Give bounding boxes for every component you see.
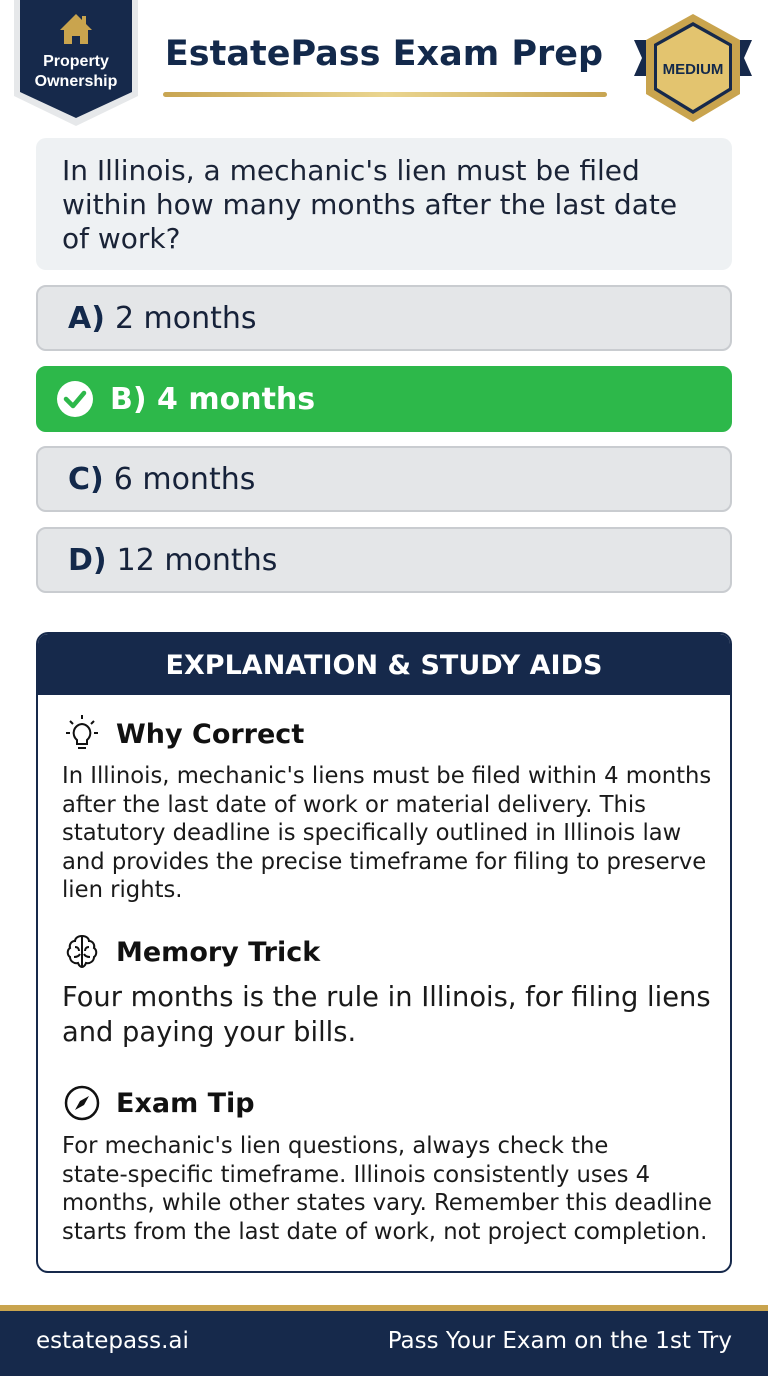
text: why correct: statutory deadline is specifically outlined in Illinois law (62, 820, 681, 846)
text: exam tip: state-specific timeframe. Illinois consistently uses 4 (62, 1162, 650, 1188)
panel header: EXPLANATION & STUDY AIDS (166, 650, 602, 681)
badge: medium: MEDIUM (663, 61, 723, 78)
heading: exam tip (64, 1086, 255, 1120)
option D (36, 527, 732, 593)
text: memory trick (62, 982, 711, 1048)
option C: C) (68, 462, 104, 496)
option B correct: B) 4 months (110, 382, 315, 416)
text: exam tip: months, while other states vary. Remember this deadline (62, 1190, 712, 1216)
question box: of work? (62, 222, 181, 255)
question box: within how many months after the last date (62, 188, 677, 221)
question box (36, 138, 732, 270)
ribbon: category: Property (43, 53, 109, 70)
text: exam tip: For mechanic's lien questions, always check the (62, 1133, 608, 1159)
title: EstatePass Exam Prep (165, 34, 603, 74)
text: why correct: lien rights. (62, 877, 182, 903)
option D: 12 months (117, 542, 277, 578)
option A: 2 months (115, 300, 257, 336)
heading: memory trick: Memory Trick (116, 936, 320, 968)
text: why correct: In Illinois, mechanic's liens must be filed within 4 months (62, 763, 711, 789)
text: memory trick: Four months is the rule in Illinois, for filing liens (62, 982, 711, 1013)
option D: D) (68, 542, 107, 578)
icon: house (60, 14, 92, 44)
text: memory trick: and paying your bills. (62, 1017, 356, 1048)
heading: exam tip: Exam Tip (116, 1088, 255, 1118)
panel: explanation (36, 632, 732, 1273)
footer right: slogan: Pass Your Exam on the 1st Try (388, 1328, 732, 1354)
text: exam tip (62, 1133, 712, 1244)
panel header (38, 634, 730, 695)
question box: In Illinois, a mechanic's lien must be filed (62, 154, 640, 187)
ribbon: category (14, 0, 138, 126)
option A (36, 285, 732, 351)
text: exam tip: starts from the last date of work, not project completion. (62, 1218, 707, 1244)
icon: check (57, 381, 93, 417)
heading: why correct: Why Correct (116, 718, 304, 750)
option B correct (36, 366, 732, 432)
ribbon: category: Ownership (35, 73, 118, 90)
text: why correct: after the last date of work or material delivery. This (62, 792, 646, 818)
option C: 6 months (114, 462, 255, 496)
option A: A) (68, 300, 105, 336)
footer (0, 1305, 768, 1376)
badge: medium (634, 14, 752, 122)
gold underline (163, 92, 607, 97)
footer left: site: estatepass.ai (36, 1328, 189, 1354)
option C (36, 446, 732, 512)
text: why correct (62, 763, 711, 903)
text: why correct: and provides the precise timeframe for filing to preserve (62, 848, 706, 874)
